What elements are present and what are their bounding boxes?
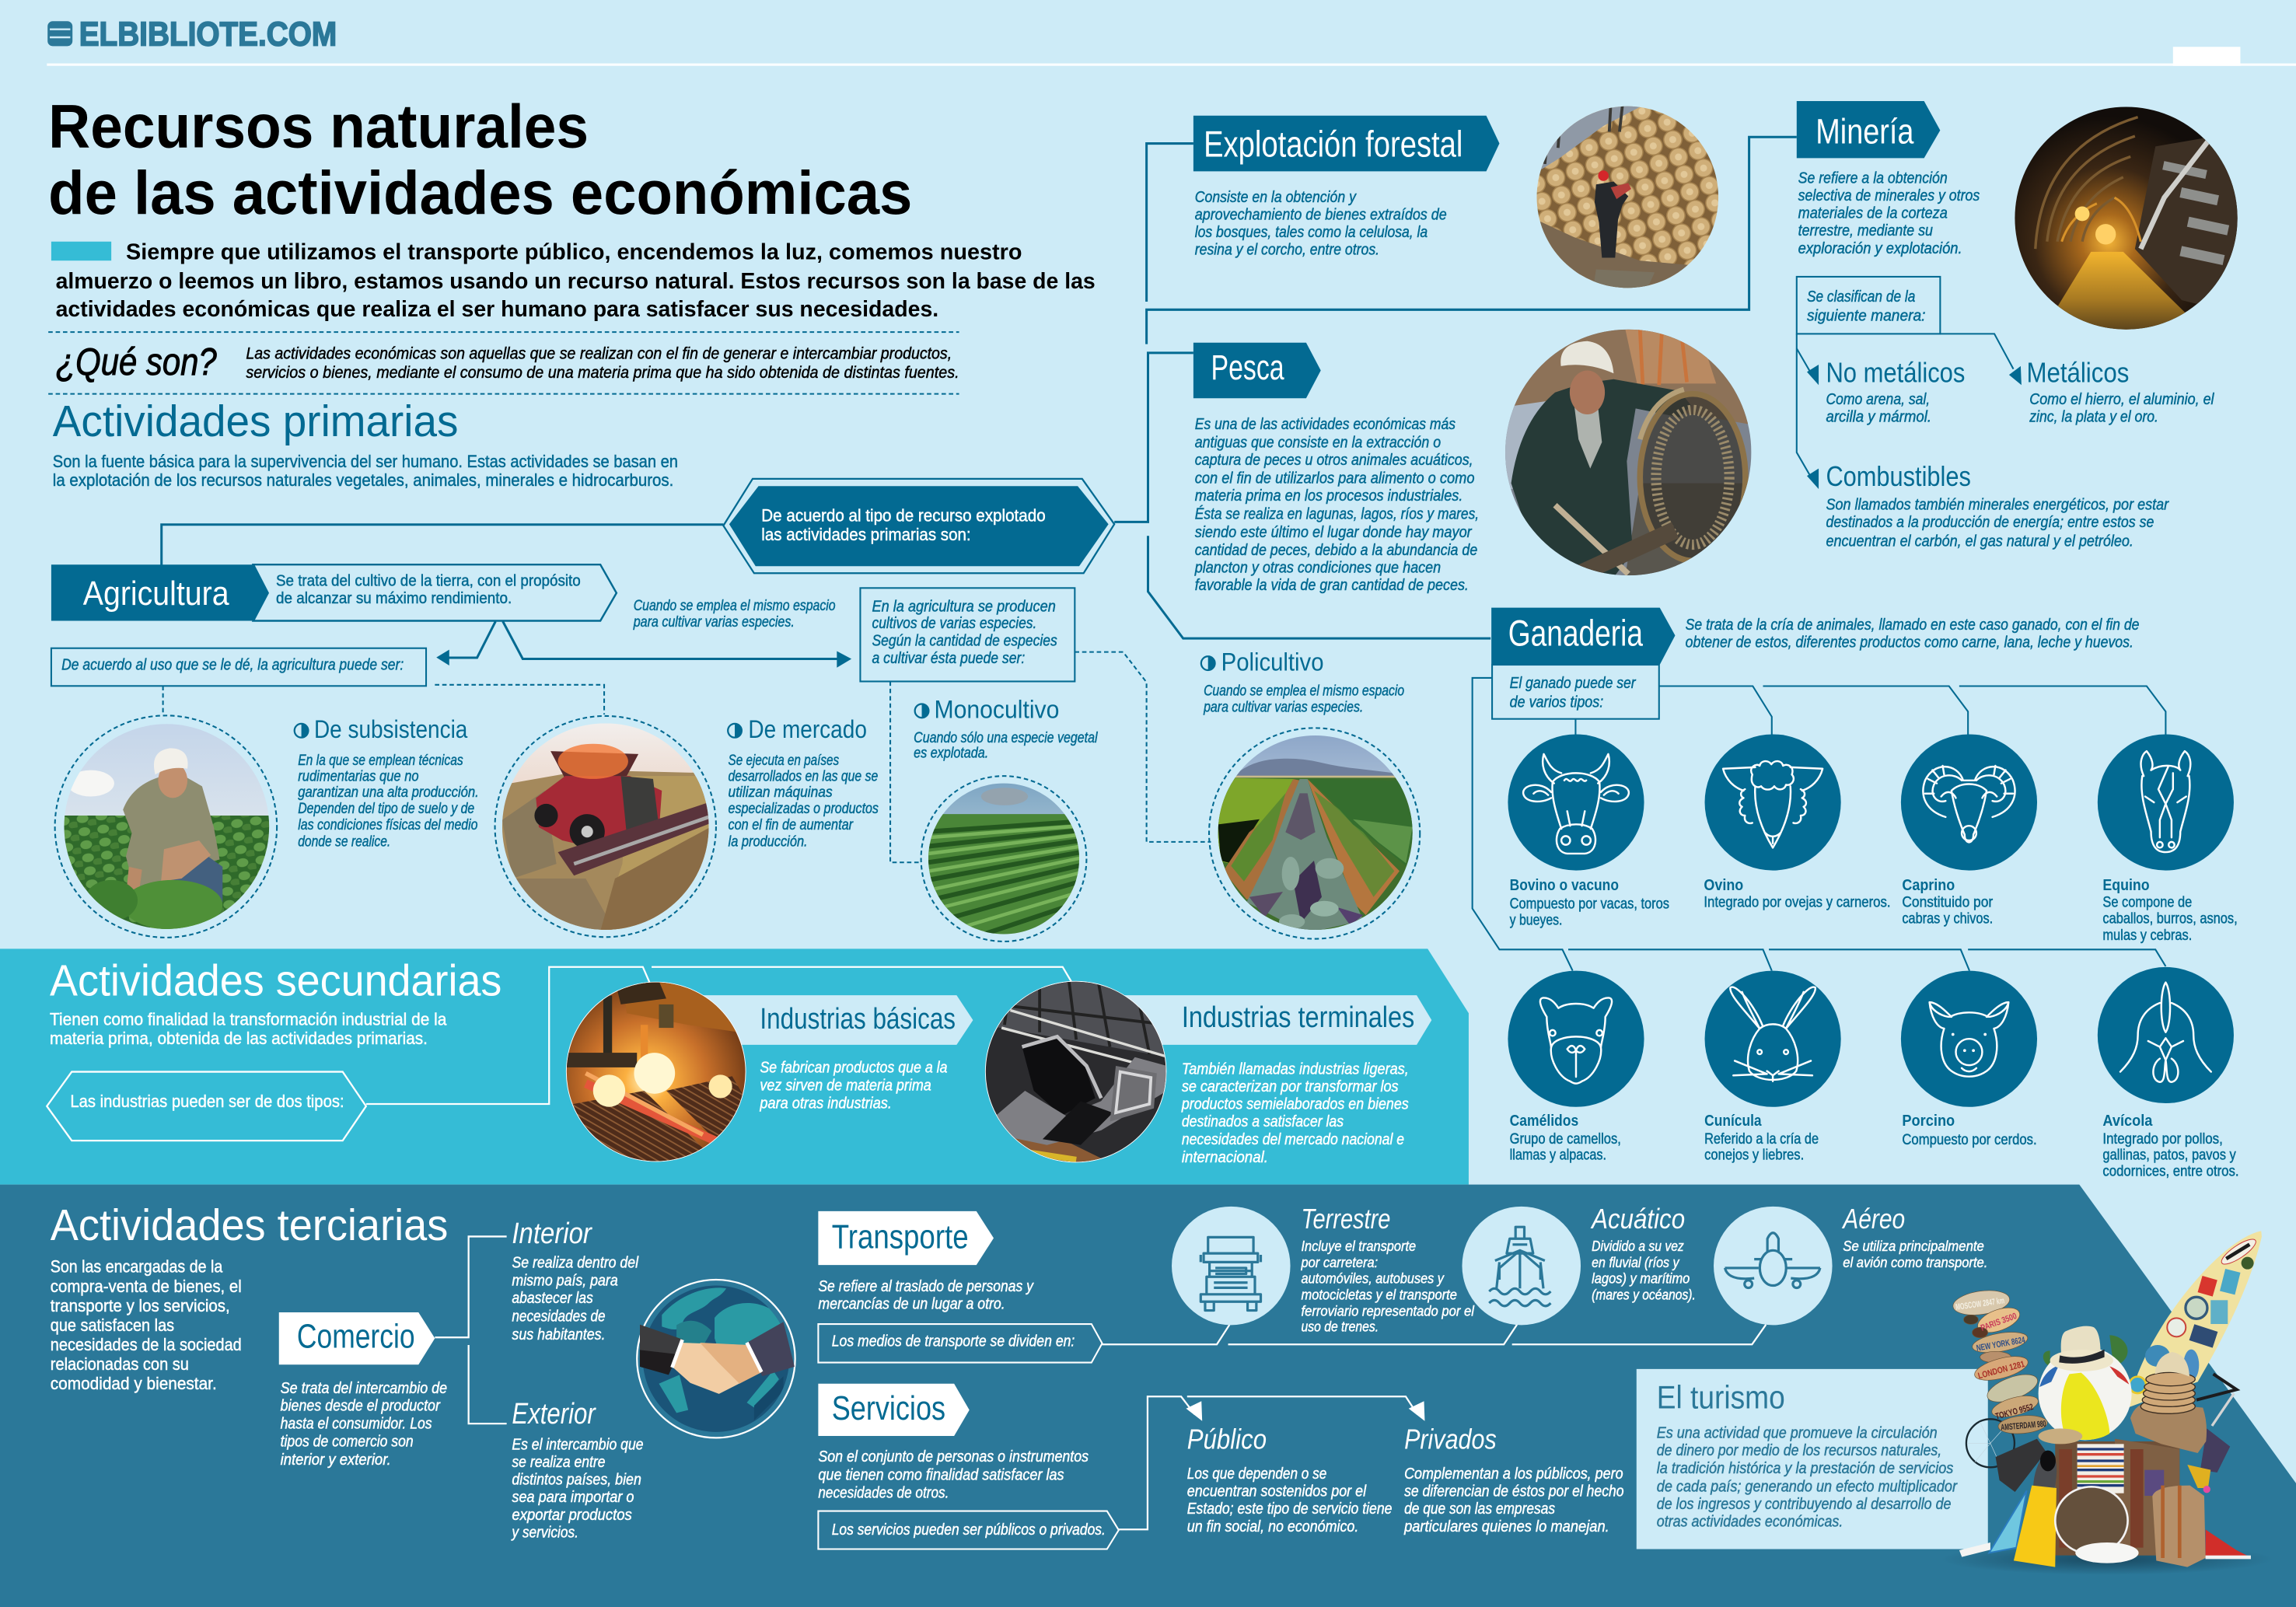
text: interior: Interior: [512, 1217, 592, 1249]
panel: transporte: Transporte: [832, 1218, 969, 1256]
text: terrestre: [1301, 1204, 1475, 1334]
panel: comercio: [279, 1312, 447, 1469]
text: aéreo: Se utiliza principalmente: [1843, 1238, 1984, 1254]
panel: minería: Se refiere a la obtención: [1798, 169, 1948, 187]
text: policultivo: Policultivo: [1221, 648, 1323, 676]
panel: transporte: mercancías de un lugar a otro.: [818, 1296, 1005, 1313]
panel: el turismo: de los ingresos y contribuyendo al desarrollo de: [1657, 1496, 1951, 1513]
ribbon: industrias terminales: [1106, 995, 1431, 1166]
box: cantidad de especies: a cultivar ésta puede ser:: [872, 650, 1025, 667]
labels: ganado fila 2: Cunícula: [1704, 1112, 1762, 1130]
top rule with white tab: [47, 47, 2296, 66]
ribbon: industrias básicas: para otras industrias.: [760, 1095, 892, 1113]
text: interior: abastecer las: [512, 1290, 593, 1307]
heading: actividades terciarias: [51, 1200, 448, 1393]
panel: minería: exploración y explotación.: [1798, 240, 1962, 257]
text: de mercado: Se ejecuta en países: [729, 752, 839, 769]
¿Qué son? definition: [48, 332, 959, 394]
band: actividades secundarias: [0, 948, 1469, 1185]
illustration: tourism luggage pile: PARIS 3500: [1980, 1312, 2018, 1333]
heading: actividades terciarias: necesidades de la sociedad: [51, 1335, 242, 1354]
text: privados: Privados: [1404, 1424, 1497, 1455]
hexagon: tipos de industrias: Las industrias pueden ser de dos tipos:: [70, 1092, 344, 1111]
panel: comercio: Comercio: [297, 1319, 415, 1356]
text: privados: particulares quienes lo manejan.: [1403, 1518, 1609, 1535]
ribbon: industrias básicas: Industrias básicas: [760, 1002, 956, 1035]
intro paragraph: actividades económicas que realiza el ser humano para satisfacer sus necesidades.: [56, 296, 938, 321]
labels: ganado fila 1: [1510, 876, 2238, 944]
panel: el turismo: El turismo: [1657, 1378, 1785, 1415]
panel: minería: selectiva de minerales y otros: [1798, 187, 1980, 204]
text: exterior: distintos países, bien: [512, 1472, 641, 1489]
panel: minería: materiales de la corteza: [1798, 205, 1948, 222]
icon: porcino: [1901, 971, 2037, 1107]
note: policultivo duplicated: para cultivar varias especies.: [633, 613, 795, 631]
text: aéreo: Aéreo: [1842, 1204, 1905, 1235]
heading: actividades secundarias: materia prima, obtenida de las actividades primarias.: [50, 1029, 428, 1048]
ribbon: industrias terminales: destinados a satisfacer las: [1182, 1113, 1344, 1130]
connector lines: transporte: [1103, 1325, 1766, 1344]
ribbon: industrias terminales: Industrias terminales: [1182, 1001, 1414, 1033]
labels: ganado fila 2: llamas y alpacas.: [1510, 1147, 1606, 1164]
panel: pesca: Pesca: [1211, 348, 1284, 387]
illustration: tourism luggage pile: TOKYO 9552: [1994, 1403, 2035, 1422]
text: de subsistencia: las condiciones físicas del medio: [298, 816, 478, 833]
text: de subsistencia: donde se realice.: [298, 833, 390, 851]
panel: comercio: bienes desde el productor: [281, 1398, 441, 1415]
panel: ganadería header: Ganaderia: [1508, 613, 1644, 654]
heading: actividades primarias: Actividades primarias: [53, 397, 458, 445]
panel: clasificación minería: Se clasifican de la: [1807, 288, 1915, 306]
arrows: agricultura: [436, 621, 851, 668]
panel: comercio: Se trata del intercambio de: [281, 1380, 447, 1397]
icon: camélidos: [1508, 971, 1644, 1107]
text: terrestre: motocicletas y el transporte: [1301, 1287, 1457, 1303]
labels: ganado fila 1: Caprino: [1902, 876, 1955, 894]
heading: actividades primarias: la explotación de los recursos naturales vegetales, animales, minerales e hidrocarburos.: [53, 470, 673, 490]
icon: ship: [1462, 1207, 1581, 1325]
photo: farmer in field: [63, 723, 271, 933]
box: cantidad de especies: Según la cantidad de especies: [872, 633, 1057, 650]
heading: actividades terciarias: relacionadas con su: [51, 1354, 189, 1374]
panel: pesca: Ésta se realiza en lagunas, lagos, ríos y mares,: [1195, 505, 1479, 523]
panel: explotación forestal: resina y el corcho, entre otros.: [1195, 242, 1379, 259]
title: de las actividades económicas: [48, 158, 912, 227]
text: terrestre: uso de trenes.: [1301, 1318, 1379, 1334]
labels: ganado fila 1: y bueyes.: [1510, 911, 1562, 928]
panel: explotación forestal: aprovechamiento de bienes extraídos de: [1195, 206, 1447, 223]
connector lines: ganado: [1473, 678, 2165, 971]
text: de mercado: especializadas o productos: [729, 800, 879, 817]
panel: el turismo: de cada país; generando un efecto multiplicador: [1657, 1478, 1958, 1495]
panel: pesca: favorable la vida de gran cantidad de peces.: [1195, 577, 1469, 594]
text: no metálicos: Como arena, sal,: [1826, 391, 1930, 408]
text: aéreo: el avión como transporte.: [1843, 1254, 1987, 1270]
box: cantidad de especies: cultivos de varias especies.: [872, 615, 1036, 632]
panel: transporte: Se refiere al traslado de personas y: [818, 1278, 1034, 1295]
text: público: Los que dependen o se: [1187, 1466, 1326, 1483]
text: público: encuentran sostenidos por el: [1187, 1483, 1367, 1500]
text: terrestre: Terrestre: [1301, 1204, 1390, 1235]
text: monocultivo: Cuando sólo una especie vegetal: [914, 729, 1098, 746]
panel: pesca: materia prima en los procesos industriales.: [1195, 487, 1463, 505]
box: uso de la agricultura: De acuerdo al uso que se le dé, la agricultura puede ser:: [61, 657, 404, 674]
dashed ring: mercado: [495, 716, 716, 937]
text: público: un fin social, no económico.: [1187, 1518, 1358, 1535]
panel: servicios: Servicios: [832, 1390, 945, 1427]
text: de subsistencia: De subsistencia: [314, 715, 468, 743]
text: policultivo: Cuando se emplea el mismo espacio: [1204, 683, 1404, 700]
text: no metálicos: No metálicos: [1826, 358, 1965, 389]
panel: el turismo: otras actividades económicas.: [1657, 1514, 1843, 1531]
panel: explotación forestal: Explotación forestal: [1204, 124, 1463, 165]
¿Qué son? definition: Las actividades económicas son aquellas que se realizan con el fin de generar e intercambiar productos,: [246, 343, 952, 362]
panel: comercio: hasta el consumidor. Los: [281, 1416, 432, 1433]
text: de mercado: desarrollados en las que se: [729, 768, 878, 785]
hexagon: tipo de recurso: las actividades primarias son:: [761, 525, 971, 544]
icon: globe handshake: [637, 1280, 795, 1438]
labels: ganado fila 2: Camélidos: [1510, 1112, 1578, 1130]
labels: ganado fila 1: Constituido por: [1902, 894, 1994, 911]
panel: comercio: interior y exterior.: [281, 1452, 391, 1469]
text: público: Estado; este tipo de servicio tiene: [1187, 1500, 1392, 1518]
text: de mercado: utilizan máquinas: [729, 784, 833, 801]
labels: ganado fila 1: caballos, burros, asnos,: [2102, 910, 2238, 927]
labels: ganado fila 1: Equino: [2102, 876, 2150, 894]
labels: ganado fila 2: Grupo de camellos,: [1510, 1130, 1621, 1148]
ribbon: industrias terminales: internacional.: [1182, 1148, 1268, 1166]
text: policultivo: para cultivar varias especies.: [1203, 698, 1363, 715]
text: combustibles: encuentran el carbón, el gas natural y el petróleo.: [1826, 533, 2133, 550]
text: exterior: Es el intercambio que: [512, 1436, 644, 1453]
icon: avícola: [2098, 967, 2234, 1103]
text: privados: de que son las empresas: [1404, 1500, 1555, 1518]
text: acuático: (mares y océanos).: [1592, 1287, 1696, 1303]
panel: agricultura header: Se trata del cultivo de la tierra, con el propósito: [276, 571, 581, 589]
dashed ring: subsistencia: [55, 715, 277, 938]
panel: servicios: Los servicios pueden ser públicos o privados.: [832, 1521, 1106, 1539]
labels: ganado fila 1: Bovino o vacuno: [1510, 876, 1619, 894]
text: privados: Complementan a los públicos, pero: [1404, 1466, 1623, 1483]
text: combustibles: Combustibles: [1826, 461, 1971, 492]
dashed ring: monocultivo: [921, 776, 1086, 941]
title: [48, 91, 912, 227]
labels: ganado fila 1: Compuesto por vacas, toros: [1510, 896, 1669, 913]
heading: actividades terciarias: Son las encargadas de la: [51, 1257, 223, 1277]
labels: ganado fila 1: Se compone de: [2102, 894, 2192, 911]
labels: ganado fila 1: Ovino: [1704, 876, 1743, 894]
hexagon: tipo de recurso: [723, 479, 1114, 573]
band: actividades terciarias: [0, 1185, 2296, 1607]
heading: actividades terciarias: compra-venta de bienes, el: [51, 1277, 242, 1296]
illustration: tourism luggage pile: LONDON 1281: [1977, 1360, 2026, 1381]
panel: minería: [1797, 101, 1980, 257]
text: de mercado: [728, 715, 879, 851]
labels: ganado fila 2: Compuesto por cerdos.: [1902, 1131, 2037, 1148]
panel: el turismo: de dinero por medio de los recursos naturales,: [1657, 1442, 1941, 1459]
connector lines: comercio: [435, 1236, 507, 1424]
text: interior: Se realiza dentro del: [512, 1255, 639, 1272]
text: de subsistencia: garantizan una alta producción.: [298, 784, 479, 801]
panel: pesca: plancton y otras condiciones que hacen: [1194, 559, 1441, 576]
intro paragraph: [51, 239, 1096, 321]
labels: ganado fila 1: Integrado por ovejas y carneros.: [1704, 894, 1891, 911]
panel: minería: Minería: [1815, 112, 1914, 152]
panel: agricultura header: Agricultura: [83, 575, 229, 613]
box: cantidad de especies: [860, 588, 1075, 681]
¿Qué son? definition: servicios o bienes, mediante el consumo de una materia prima que ha sido obtenida de distintas fuentes.: [246, 362, 959, 382]
text: privados: se diferencian de éstos por el hecho: [1404, 1483, 1624, 1500]
panel: explotación forestal: los bosques, tales como la celulosa, la: [1195, 224, 1428, 241]
text: público: [1187, 1424, 1392, 1535]
labels: ganado fila 2: gallinas, patos, pavos y: [2102, 1147, 2236, 1164]
heading: actividades secundarias: [50, 956, 501, 1048]
panel: pesca: cantidad de peces, debido a la abundancia de: [1195, 542, 1477, 559]
text: interior: [512, 1217, 639, 1343]
note: policultivo duplicated: Cuando se emplea el mismo espacio: [634, 597, 836, 614]
text: terrestre: Incluye el transporte: [1301, 1238, 1416, 1254]
text: metálicos: [2026, 358, 2214, 425]
ribbon: industrias terminales: se caracterizan por transformar los: [1182, 1078, 1399, 1095]
text: exterior: [511, 1397, 644, 1541]
panel: ganadería header: Se trata de la cría de animales, llamado en este caso ganado, con el fin de: [1686, 617, 2139, 634]
heading: actividades terciarias: que satisfacen las: [51, 1315, 174, 1335]
box: uso de la agricultura: [51, 648, 426, 686]
text: exterior: Exterior: [512, 1397, 596, 1430]
panel: pesca: siendo este último el lugar donde hay mayor: [1195, 524, 1473, 541]
text: policultivo: [1201, 648, 1404, 715]
panel: servicios: que tienen como finalidad satisfacer las: [818, 1466, 1064, 1483]
heading: actividades primarias: [53, 397, 678, 490]
intro paragraph: Siempre que utilizamos el transporte público, encendemos la luz, comemos nuestro: [126, 239, 1022, 264]
text: público: Público: [1187, 1424, 1267, 1455]
illustration: tourism luggage pile: MOSCOW 2847 km: [1955, 1296, 2005, 1312]
hexagon: tipos de industrias: [47, 1072, 366, 1141]
ribbon: industrias terminales: necesidades del mercado nacional e: [1182, 1130, 1404, 1148]
text: de mercado: De mercado: [748, 715, 867, 743]
labels: ganado fila 2: [1510, 1112, 2239, 1179]
panel: ganadería header: obtener de estos, diferentes productos como carne, lana, leche y huevos.: [1686, 634, 2133, 651]
heading: actividades primarias: Son la fuente básica para la supervivencia del ser humano. Estas actividades se basan en: [53, 452, 678, 471]
labels: ganado fila 2: conejos y liebres.: [1704, 1147, 1804, 1164]
text: interior: mismo país, para: [512, 1273, 618, 1290]
ribbon: industrias terminales: También llamadas industrias ligeras,: [1182, 1060, 1409, 1078]
labels: ganado fila 2: Integrado por pollos,: [2102, 1130, 2223, 1148]
heading: actividades terciarias: Actividades terciarias: [51, 1200, 448, 1249]
text: terrestre: ferroviario representado por el: [1301, 1303, 1475, 1319]
panel: el turismo: Es una actividad que promueve la circulación: [1657, 1424, 1938, 1441]
ribbon: industrias básicas: [688, 995, 973, 1113]
photo: steel mill: [565, 981, 746, 1162]
arrows: clasificación minería: [1797, 334, 2022, 489]
icon: ovino: [1705, 734, 1841, 871]
text: acuático: lagos) y marítimo: [1592, 1270, 1690, 1287]
text: interior: necesidades de: [512, 1308, 606, 1326]
icon: bovino: [1508, 734, 1644, 871]
text: acuático: [1590, 1204, 1696, 1303]
connector lines: primary tree: [162, 137, 1797, 638]
heading: actividades terciarias: comodidad y bienestar.: [51, 1374, 217, 1393]
text: combustibles: destinados a la producción de energía; entre estos se: [1826, 514, 2154, 531]
text: exterior: sea para importar o: [512, 1489, 634, 1506]
text: metálicos: Como el hierro, el aluminio, el: [2029, 391, 2214, 408]
panel: clasificación minería: siguiente manera:: [1807, 307, 1926, 324]
heading: actividades secundarias: Tienen como finalidad la transformación industrial de la: [50, 1009, 447, 1029]
ribbon: industrias terminales: productos semielaborados en bienes: [1181, 1095, 1409, 1113]
icon: plane: [1714, 1207, 1833, 1325]
text: aéreo: [1842, 1204, 1987, 1270]
box: cantidad de especies: En la agricultura se producen: [872, 598, 1056, 615]
icon: caprino: [1901, 734, 2037, 871]
panel: pesca: Es una de las actividades económicas más: [1195, 416, 1456, 433]
labels: ganado fila 1: cabras y chivos.: [1902, 910, 1993, 927]
panel: transporte: Los medios de transporte se dividen en:: [832, 1333, 1075, 1350]
ribbon: industrias básicas: vez sirven de materia prima: [760, 1077, 931, 1095]
panel: servicios: necesidades de otros.: [818, 1485, 949, 1502]
title: Recursos naturales: [48, 91, 589, 160]
text: de subsistencia: [295, 715, 479, 851]
panel: servicios: Son el conjunto de personas o instrumentos: [818, 1448, 1089, 1466]
panel: pesca: [1193, 343, 1479, 594]
text: acuático: Dividido a su vez: [1592, 1238, 1684, 1254]
hexagon: tipo de recurso: De acuerdo al tipo de recurso explotado: [761, 505, 1046, 525]
text: terrestre: por carretera:: [1301, 1254, 1378, 1270]
heading: actividades terciarias: transporte y los servicios,: [51, 1296, 230, 1315]
panel: ganadería header: [1491, 608, 2139, 665]
note: policultivo duplicated: [633, 597, 836, 631]
icon: equino: [2098, 734, 2234, 871]
photo: monoculture rows: [928, 784, 1081, 940]
text: no metálicos: arcilla y mármol.: [1826, 408, 1931, 425]
panel: comercio: tipos de comercio son: [281, 1434, 414, 1451]
dashed connectors: agricultura: [163, 652, 1211, 862]
illustration: tourism luggage pile: NEW YORK 8624: [1976, 1336, 2026, 1354]
ribbon: industrias básicas: Se fabrican productos que a la: [760, 1059, 947, 1077]
text: de subsistencia: rudimentarias que no: [298, 768, 419, 785]
panel: explotación forestal: Consiste en la obtención y: [1195, 189, 1358, 206]
heading: actividades secundarias: Actividades secundarias: [50, 956, 501, 1005]
arrows: servicios: [1119, 1396, 1424, 1529]
panel: pesca: captura de peces u otros animales acuáticos,: [1195, 452, 1473, 469]
labels: ganado fila 1: mulas y cebras.: [2102, 927, 2192, 944]
text: de subsistencia: Dependen del tipo de suelo y de: [298, 800, 474, 817]
text: terrestre: automóviles, autobuses y: [1301, 1270, 1445, 1287]
panel: el turismo: la tradición histórica y la prestación de servicios: [1657, 1460, 1953, 1477]
text: interior: sus habitantes.: [512, 1326, 606, 1343]
intro paragraph: almuerzo o leemos un libro, estamos usando un recurso natural. Estos recursos son la base de las: [56, 268, 1096, 293]
panel: explotación forestal: [1193, 116, 1499, 259]
text: monocultivo: es explotada.: [914, 745, 988, 762]
labels: ganado fila 2: Referido a la cría de: [1704, 1130, 1819, 1148]
labels: ganado fila 2: codornices, entre otros.: [2102, 1162, 2239, 1179]
box: tipos de ganado: [1492, 665, 1659, 719]
text: exterior: y servicios.: [511, 1524, 578, 1541]
labels: ganado fila 2: Avícola: [2102, 1112, 2153, 1130]
text: metálicos: Metálicos: [2026, 358, 2129, 389]
text: monocultivo: Monocultivo: [935, 696, 1059, 724]
dashed ring: policultivo: [1209, 728, 1420, 939]
¿Qué son? definition: ¿Qué son?: [56, 341, 217, 383]
text: metálicos: zinc, la plata y el oro.: [2029, 408, 2158, 425]
text: de mercado: con el fin de aumentar: [729, 816, 854, 833]
panel: pesca: antiguas que consiste en la extracción o: [1195, 434, 1441, 451]
icon: truck: [1172, 1207, 1291, 1325]
panel: minería: terrestre, mediante su: [1798, 222, 1933, 239]
panel: agricultura header: de alcanzar su máximo rendimiento.: [276, 589, 512, 607]
text: de subsistencia: En la que se emplean técnicas: [298, 752, 463, 769]
illustration: tourism luggage pile: AMSTERDAM 980: [2001, 1420, 2046, 1433]
text: privados: [1403, 1424, 1624, 1535]
text: de mercado: la producción.: [729, 833, 808, 851]
text: combustibles: [1826, 461, 2169, 550]
box: tipos de ganado: de varios tipos:: [1510, 694, 1603, 711]
panel: pesca: con el fin de utilizarlos para alimento o como: [1195, 470, 1474, 487]
text: acuático: Acuático: [1590, 1204, 1685, 1235]
text: combustibles: Son llamados también minerales energéticos, por estar: [1826, 496, 2169, 513]
panel: transporte: [818, 1211, 1103, 1363]
photo: car factory: [984, 981, 1169, 1167]
box: tipos de ganado: El ganado puede ser: [1510, 675, 1637, 692]
panel: servicios: [818, 1384, 1119, 1549]
connector lines: industrias: [366, 967, 1072, 1104]
photo: mine tunnel: [2014, 106, 2240, 333]
text: exterior: exportar productos: [512, 1507, 632, 1524]
icon: cunícula: [1705, 971, 1841, 1107]
logo: ELBIBLIOTE.COM: [79, 16, 337, 53]
photo: polyculture rows: [1215, 734, 1415, 933]
photo: fisherman: [1505, 330, 1751, 587]
text: acuático: en fluvial (ríos y: [1592, 1254, 1680, 1270]
panel: el turismo: [1637, 1369, 1988, 1549]
panel: agricultura header: [51, 564, 617, 621]
text: exterior: se realiza entre: [512, 1454, 606, 1471]
illustration: tourism luggage pile: [1941, 1231, 2273, 1575]
text: monocultivo: [914, 696, 1098, 762]
text: no metálicos: [1826, 358, 1965, 425]
panel: clasificación minería: [1797, 277, 1940, 334]
photo: logs: [1536, 106, 1719, 288]
labels: ganado fila 2: Porcino: [1902, 1112, 1955, 1130]
photo: harvester: [502, 723, 711, 931]
